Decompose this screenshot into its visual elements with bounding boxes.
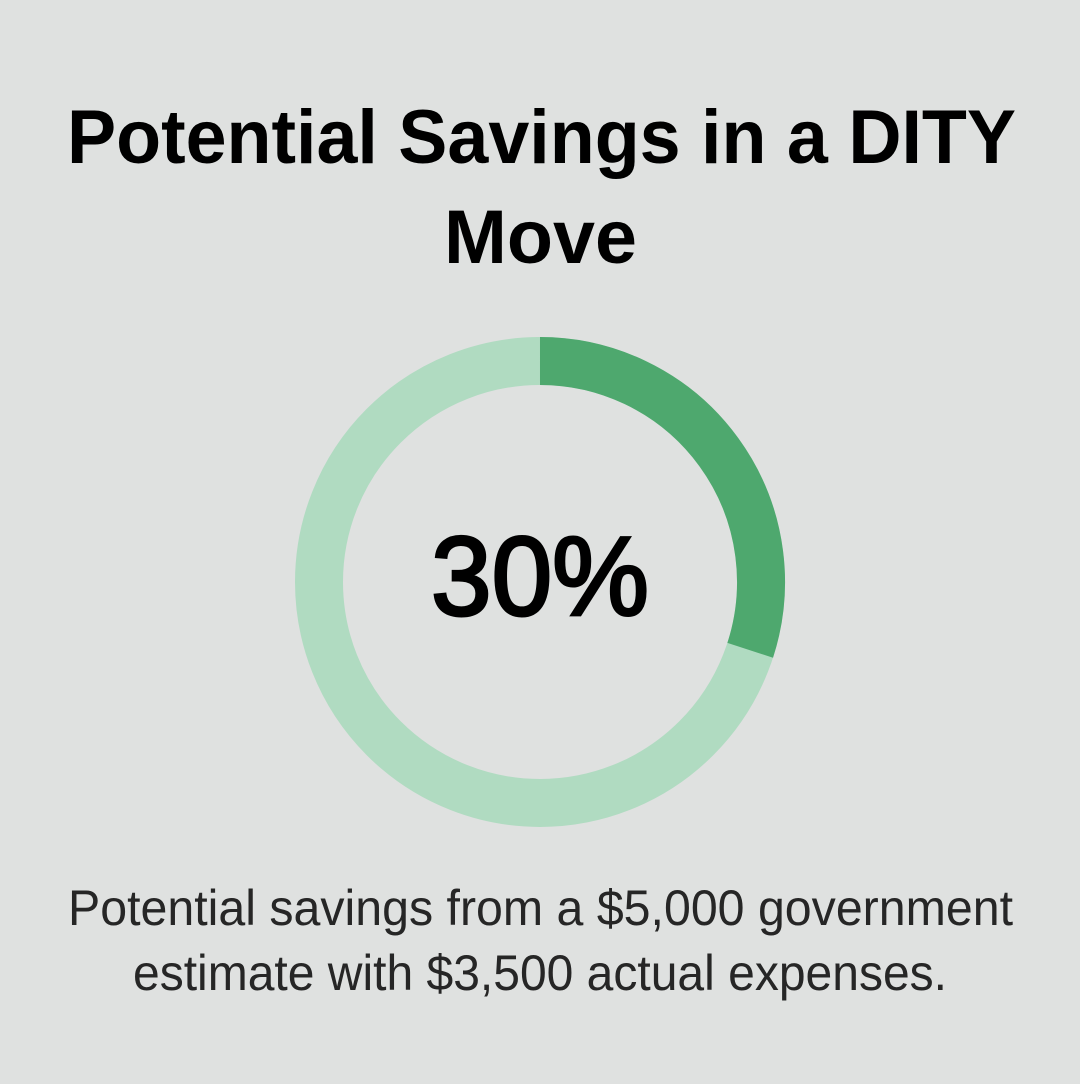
title [67,95,1016,280]
donut chart: 30% savings [319,361,761,803]
caption: Potential savings from a $5,000 government [68,880,1013,936]
caption [68,880,1013,1001]
title: Potential Savings in a DITY [67,95,1016,180]
center value: 30% [431,514,649,639]
title: Move [444,195,637,280]
caption: estimate with $3,500 actual expenses. [133,945,947,1001]
